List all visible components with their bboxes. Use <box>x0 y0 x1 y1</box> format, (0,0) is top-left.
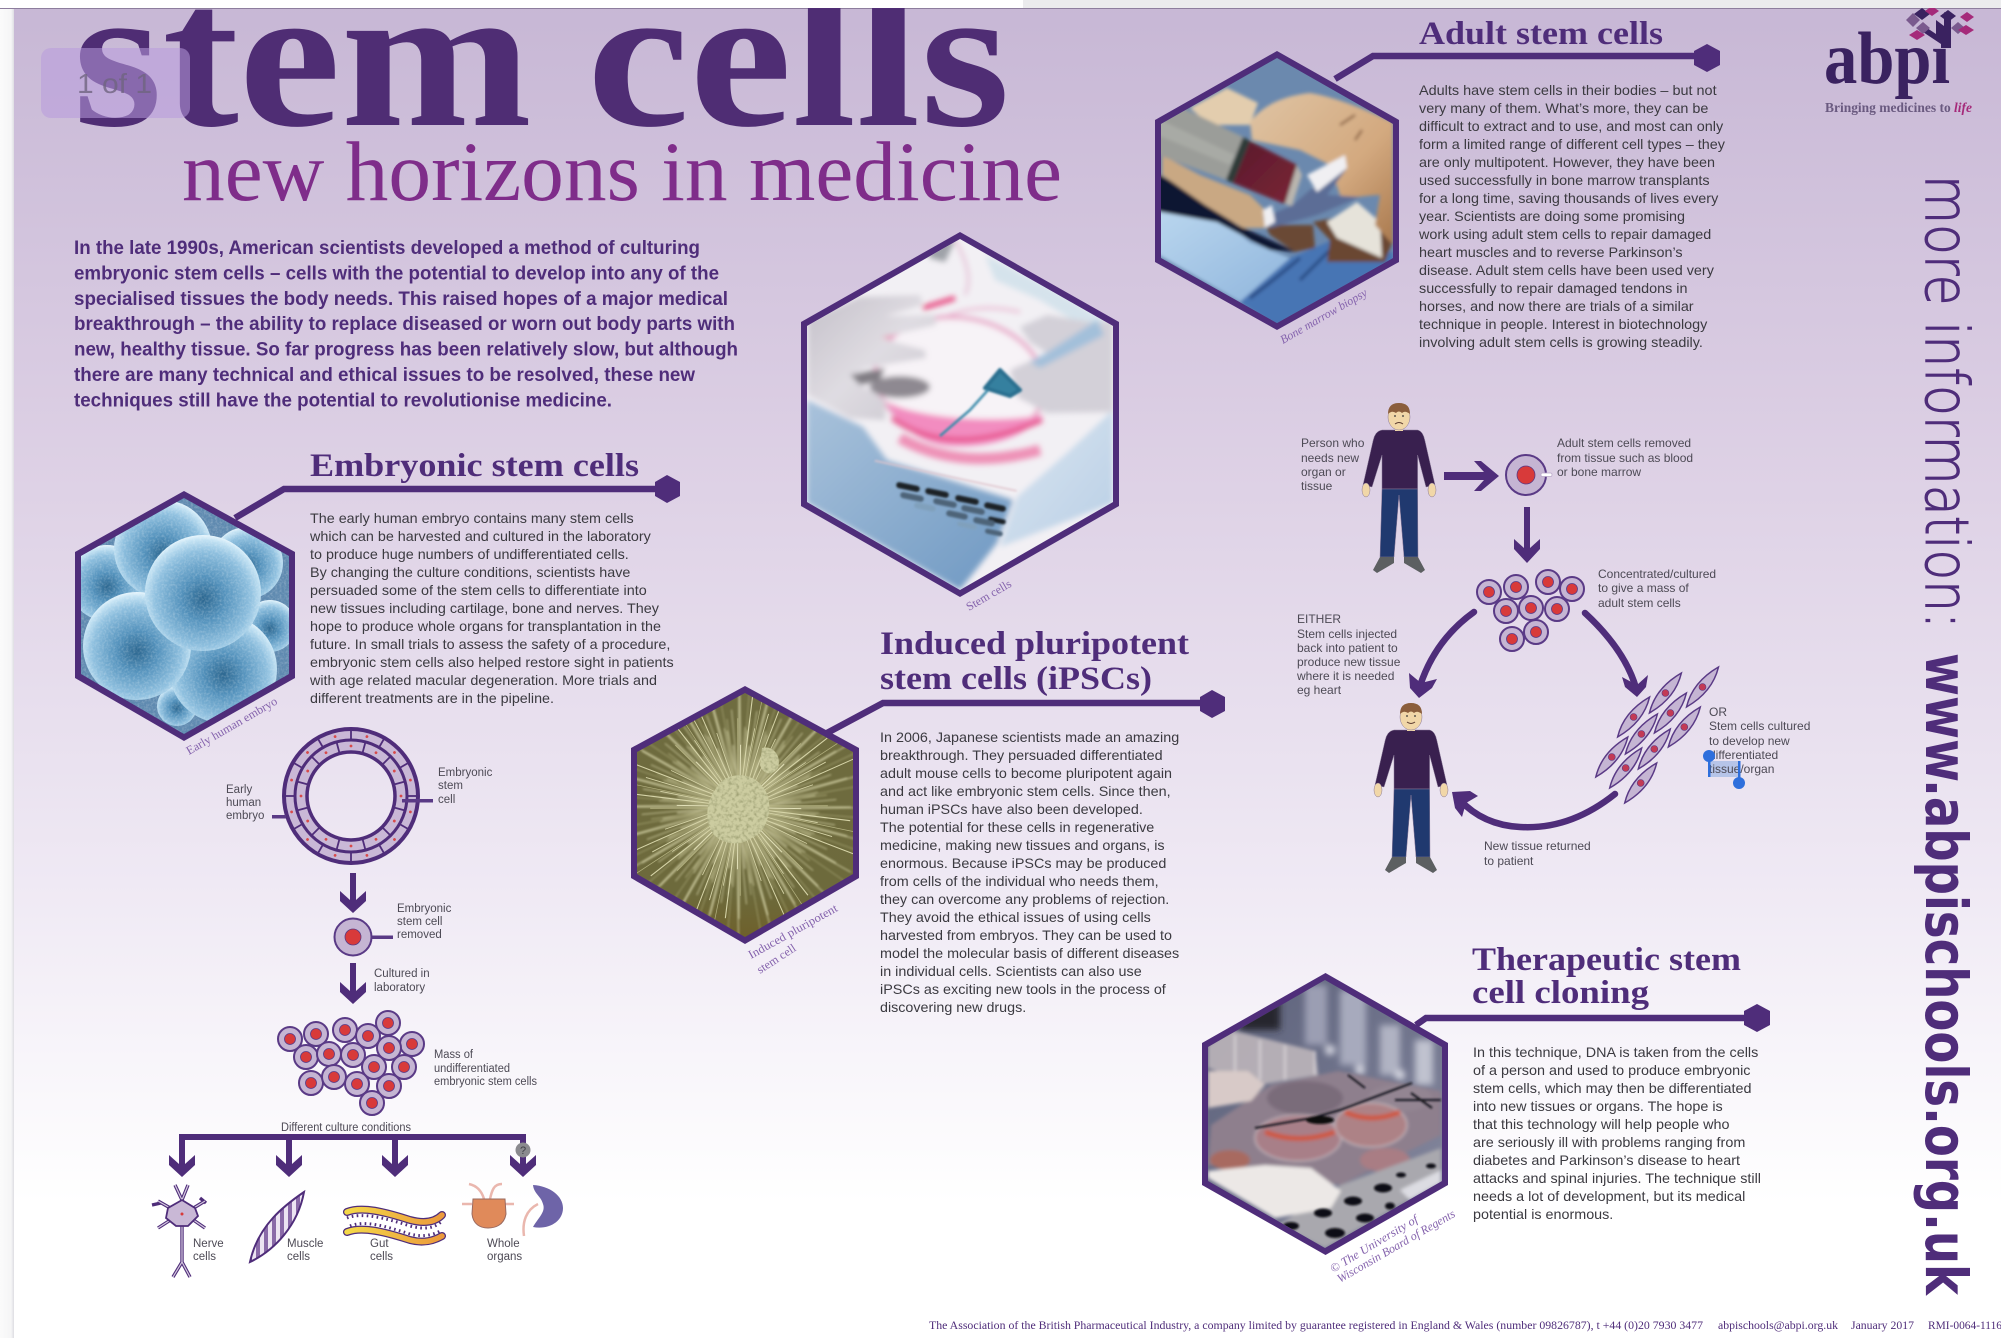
label: gut cells: cells <box>370 1251 393 1263</box>
footer: The Association of the British Pharmaceutical Industry, a company limited by guarantee registered in England & Wales (number 09826787), t +44 (0)20 7930 3477 <box>929 1320 1703 1332</box>
label: embryonic stem cell removed: stem cell <box>397 916 442 928</box>
label: embryonic stem cell: cell <box>438 794 455 806</box>
intro text: embryonic stem cells – cells with the potential to develop into any of the <box>74 263 719 284</box>
arrow: tissue returned to patient <box>1452 791 1615 827</box>
browser chrome: left margin <box>0 9 14 1338</box>
label: either route <box>1296 612 1401 697</box>
page counter badge: 1 of 1 <box>77 68 152 99</box>
label: person who needs new organ: needs new <box>1301 451 1359 465</box>
icon: logo tree <box>1906 6 1974 48</box>
heading: therapeutic cloning <box>1472 942 1741 1011</box>
body text: embryonic stem cells also helped restore sight in patients <box>310 654 674 670</box>
body text: attacks and spinal injuries. The technique still <box>1473 1170 1761 1186</box>
photo: cell culture plate <box>1200 970 1450 1260</box>
body text: They avoid the ethical issues of using cells <box>880 909 1151 925</box>
panel: embryonic stem cells <box>69 448 680 1277</box>
label: embryonic stem cell: stem <box>438 780 463 792</box>
intro text: specialised tissues the body needs. This raised hopes of a major medical <box>74 289 728 310</box>
body text: iPSCs as exciting new tools in the process of <box>880 981 1166 997</box>
label: cultured in laboratory: laboratory <box>374 982 425 994</box>
intro text <box>74 238 738 411</box>
heading: embryonic stem cells: Embryonic stem cells <box>310 448 639 484</box>
intro text: breakthrough – the ability to replace diseased or worn out body parts with <box>74 314 735 335</box>
body text: to produce huge numbers of undifferentiated cells. <box>310 546 629 562</box>
panel: adult stem cells <box>1150 16 1810 873</box>
icon: removed stem cell <box>334 918 393 956</box>
label: whole organs: organs <box>487 1251 522 1263</box>
body text: heart muscles and to reverse Parkinson’s <box>1419 244 1683 260</box>
connector line and end marker <box>827 690 1225 733</box>
label: either route: back into patient to <box>1297 641 1398 655</box>
logo: abpi: abpi <box>1824 18 1950 100</box>
icon: gut cells <box>347 1210 442 1242</box>
caption: University of Wisconsin: © The University of <box>1327 1211 1422 1276</box>
body text: persuaded some of the stem cells to differentiate into <box>310 582 647 598</box>
icon: question mark: ? <box>520 1145 526 1157</box>
label: new tissue returned: to patient <box>1484 854 1534 868</box>
body text: of a person and used to produce embryonic <box>1473 1062 1750 1078</box>
body text: with age related macular degeneration. More trials and <box>309 672 657 688</box>
body text: involving adult stem cells is growing steadily. <box>1419 334 1703 350</box>
label: or route: to develop new <box>1709 734 1790 748</box>
label: nerve cells <box>193 1238 224 1263</box>
connector line and end marker <box>235 475 680 518</box>
arrow: or, to differentiated cells <box>1585 613 1648 697</box>
logo: abpi <box>1824 6 1974 116</box>
caption: bone marrow biopsy: Bone marrow biopsy <box>1278 285 1370 347</box>
body text: hope to produce whole organs for transplantation in the <box>310 618 661 634</box>
subtitle: new horizons in medicine <box>182 125 1062 219</box>
heading: iPSCs <box>880 626 1189 697</box>
icon: question mark <box>516 1142 530 1158</box>
label: adult stem cells removed: from tissue such as blood <box>1557 451 1693 465</box>
body text: horses, and now there are trials of a similar <box>1419 298 1694 314</box>
body text: very many of them. What’s more, they can be <box>1419 100 1709 116</box>
arrow: person to cell <box>1444 461 1499 491</box>
label: mass of undifferentiated cells <box>434 1049 537 1088</box>
icon: muscle cell <box>250 1192 304 1262</box>
title <box>80 8 1004 127</box>
label: early human embryo: embryo <box>226 810 264 822</box>
heading: iPSCs: Induced pluripotent <box>880 626 1189 662</box>
heading: therapeutic cloning: cell cloning <box>1472 975 1650 1011</box>
figure: treated patient <box>1374 703 1448 873</box>
label: person who needs new organ: organ or <box>1301 465 1346 479</box>
body text: successfully to repair damaged tendons in <box>1419 280 1688 296</box>
intro text: new, healthy tissue. So far progress has been relatively slow, but although <box>74 340 738 361</box>
vertical web address: more information: <box>1911 175 1981 629</box>
body text: The early human embryo contains many stem cells <box>310 510 634 526</box>
body text <box>880 729 1179 1015</box>
icon: whole organs <box>462 1184 563 1236</box>
body text: discovering new drugs. <box>880 999 1026 1015</box>
panel: induced pluripotent stem cells <box>600 626 1225 1015</box>
caption: University of Wisconsin: Wisconsin Board of Regents <box>1334 1206 1458 1286</box>
label: or route: tissue/organ <box>1709 762 1774 776</box>
label: embryonic stem cell removed: Embryonic <box>397 903 452 915</box>
body text: new tissues including cartilage, bone and nerves. They <box>310 600 659 616</box>
body text: human iPSCs have also been developed. <box>880 801 1143 817</box>
label: new tissue returned: New tissue returned <box>1484 839 1591 853</box>
caption: induced pluripotent stem cell: Induced pluripotent <box>746 901 841 962</box>
vertical web address <box>1911 175 1981 1296</box>
label: early human embryo: Early <box>226 784 252 796</box>
intro text: In the late 1990s, American scientists developed a method of culturing <box>74 238 700 259</box>
label: either route: where it is needed <box>1296 669 1394 683</box>
label: either route: eg heart <box>1297 683 1342 697</box>
connector line and end marker <box>1335 44 1720 79</box>
caption: stem cells: Stem cells <box>964 576 1014 614</box>
caption: early human embryo: Early human embryo <box>184 694 280 758</box>
browser chrome: top bar <box>0 0 2001 9</box>
label: gut cells <box>370 1238 393 1263</box>
body text: enormous. Because iPSCs may be produced <box>880 855 1166 871</box>
label: embryonic stem cell: Embryonic <box>438 767 493 779</box>
body text: breakthrough. They persuaded differentiated <box>880 747 1163 763</box>
body text: work using adult stem cells to repair damaged <box>1418 226 1711 242</box>
body text: model the molecular basis of different diseases <box>880 945 1179 961</box>
icon: nerve cell <box>152 1185 206 1277</box>
heading: therapeutic cloning: Therapeutic stem <box>1472 942 1741 978</box>
body text: for a long time, saving thousands of lives every <box>1419 190 1718 206</box>
body text: in individual cells. Scientists can also use <box>880 963 1142 979</box>
body text: and act like embryonic stem cells. Since then, <box>880 783 1171 799</box>
text selection handles <box>1703 750 1745 789</box>
figure: person needing tissue <box>1362 403 1436 573</box>
arrow: ring to cell <box>340 873 366 913</box>
body text: disease. Adult stem cells have been used very <box>1419 262 1714 278</box>
body text: adult mouse cells to become pluripotent again <box>880 765 1172 781</box>
label: concentrated/cultured: to give a mass of <box>1598 581 1689 595</box>
logo: abpi: Bringing medicines to life <box>1825 101 1972 116</box>
label: cultured in laboratory <box>374 968 430 994</box>
label: concentrated/cultured: adult stem cells <box>1598 596 1681 610</box>
body text: used successfully in bone marrow transplants <box>1419 172 1710 188</box>
label: mass of undifferentiated cells: embryonic stem cells <box>434 1076 537 1088</box>
body text: which can be harvested and cultured in the laboratory <box>309 528 651 544</box>
body text: The potential for these cells in regenerative <box>880 819 1155 835</box>
body text: harvested from embryos. They can be used to <box>880 927 1172 943</box>
body text: difficult to extract and to use, and most can only <box>1419 118 1723 134</box>
label: whole organs <box>487 1238 522 1263</box>
branching arrows <box>169 1134 536 1177</box>
body text: from cells of the individual who needs them, <box>880 873 1159 889</box>
label: muscle cells <box>287 1238 323 1263</box>
footer: RMI-0064-1116 <box>1928 1320 2001 1332</box>
page counter badge <box>41 48 190 118</box>
body text: needs a lot of development, but its medical <box>1473 1188 1745 1204</box>
label: cultured in laboratory: Cultured in <box>374 968 430 980</box>
heading: adult stem cells: Adult stem cells <box>1419 16 1663 52</box>
body text: By changing the culture conditions, scientists have <box>310 564 631 580</box>
label: early human embryo: human <box>226 797 261 809</box>
label: concentrated/cultured: Concentrated/cultured <box>1598 567 1716 581</box>
body text <box>1418 82 1725 350</box>
label: embryonic stem cell removed: removed <box>397 929 442 941</box>
body text: stem cells, which may then be differentiated <box>1473 1080 1752 1096</box>
label: or route <box>1709 705 1810 777</box>
arrow: either, to patient <box>1409 612 1474 698</box>
body text: diabetes and Parkinson’s disease to heart <box>1473 1152 1740 1168</box>
arrow: cell to cluster <box>1514 507 1540 563</box>
body text: In this technique, DNA is taken from the cells <box>1473 1044 1758 1060</box>
photo: induced pluripotent stem cell <box>631 686 859 944</box>
label: either route: Stem cells injected <box>1297 627 1397 641</box>
label: person who needs new organ <box>1301 436 1365 493</box>
label: muscle cells: Muscle <box>287 1238 323 1250</box>
label: different culture conditions: Different culture conditions <box>281 1122 411 1134</box>
label: early human embryo <box>226 784 286 822</box>
intro text: there are many technical and ethical issues to be resolved, these new <box>74 365 695 386</box>
photo: early human embryo <box>69 490 297 742</box>
photo: bone marrow biopsy <box>1150 50 1400 330</box>
label: embryonic stem cell removed <box>397 903 452 941</box>
label: person who needs new organ: tissue <box>1301 479 1333 493</box>
icon: mass of cells <box>278 1011 424 1115</box>
label: mass of undifferentiated cells: undifferentiated <box>434 1063 510 1075</box>
label: adult stem cells removed: Adult stem cells removed <box>1557 436 1691 450</box>
body text: form a limited range of different cell types – they <box>1419 136 1725 152</box>
body text: potential is enormous. <box>1473 1206 1613 1222</box>
label: nerve cells: Nerve <box>193 1238 224 1250</box>
body text: year. Scientists are doing some promising <box>1419 208 1685 224</box>
label: adult stem cells removed <box>1557 436 1693 479</box>
arrow: cultured <box>340 963 366 1004</box>
label: or route: Stem cells cultured <box>1709 719 1810 733</box>
icon: differentiated cells <box>1596 667 1718 803</box>
body text: are only multipotent. However, they have been <box>1419 154 1715 170</box>
body text: medicine, making new tissues and organs, is <box>880 837 1165 853</box>
label: mass of undifferentiated cells: Mass of <box>434 1049 474 1061</box>
footer: January 2017 <box>1851 1320 1914 1332</box>
label: either route: EITHER <box>1297 612 1341 626</box>
icon: adult stem cell <box>1506 455 1552 495</box>
label: concentrated/cultured <box>1598 567 1716 610</box>
label: nerve cells: cells <box>193 1251 216 1263</box>
body text: future. In small trials to assess the safety of a procedure, <box>310 636 670 652</box>
body text <box>309 510 674 706</box>
label: adult stem cells removed: or bone marrow <box>1557 465 1641 479</box>
body text: In 2006, Japanese scientists made an amazing <box>880 729 1179 745</box>
body text: are seriously ill with problems ranging from <box>1473 1134 1745 1150</box>
heading: iPSCs: stem cells (iPSCs) <box>880 661 1152 697</box>
body text: into new tissues or organs. The hope is <box>1473 1098 1723 1114</box>
icon: cell cluster <box>1477 570 1584 651</box>
label: gut cells: Gut <box>370 1238 389 1250</box>
panel: therapeutic stem cell cloning <box>1200 942 1770 1286</box>
body text: Adults have stem cells in their bodies – but not <box>1419 82 1717 98</box>
label: embryonic stem cell <box>402 767 493 806</box>
label: person who needs new organ: Person who <box>1301 436 1365 450</box>
intro text: techniques still have the potential to revolutionise medicine. <box>74 390 612 411</box>
label: whole organs: Whole <box>487 1238 520 1250</box>
label: new tissue returned <box>1484 839 1591 868</box>
label: or route: differentiated <box>1709 748 1778 762</box>
body text: that this technology will help people who <box>1473 1116 1730 1132</box>
body text <box>1473 1044 1761 1222</box>
body text: they can overcome any problems of rejection. <box>880 891 1169 907</box>
footer: abpischools@abpi.org.uk <box>1718 1320 1838 1332</box>
body text: technique in people. Interest in biotechnology <box>1419 316 1707 332</box>
label: muscle cells: cells <box>287 1251 310 1263</box>
body text: different treatments are in the pipeline. <box>310 690 554 706</box>
central photo: stem cells <box>800 230 1120 600</box>
label: either route: produce new tissue <box>1297 655 1401 669</box>
caption: induced pluripotent stem cell: stem cell <box>754 940 799 977</box>
connector line and end marker <box>1416 1004 1770 1032</box>
diagram: embryo ring <box>284 729 418 863</box>
label: or route: OR <box>1709 705 1727 719</box>
